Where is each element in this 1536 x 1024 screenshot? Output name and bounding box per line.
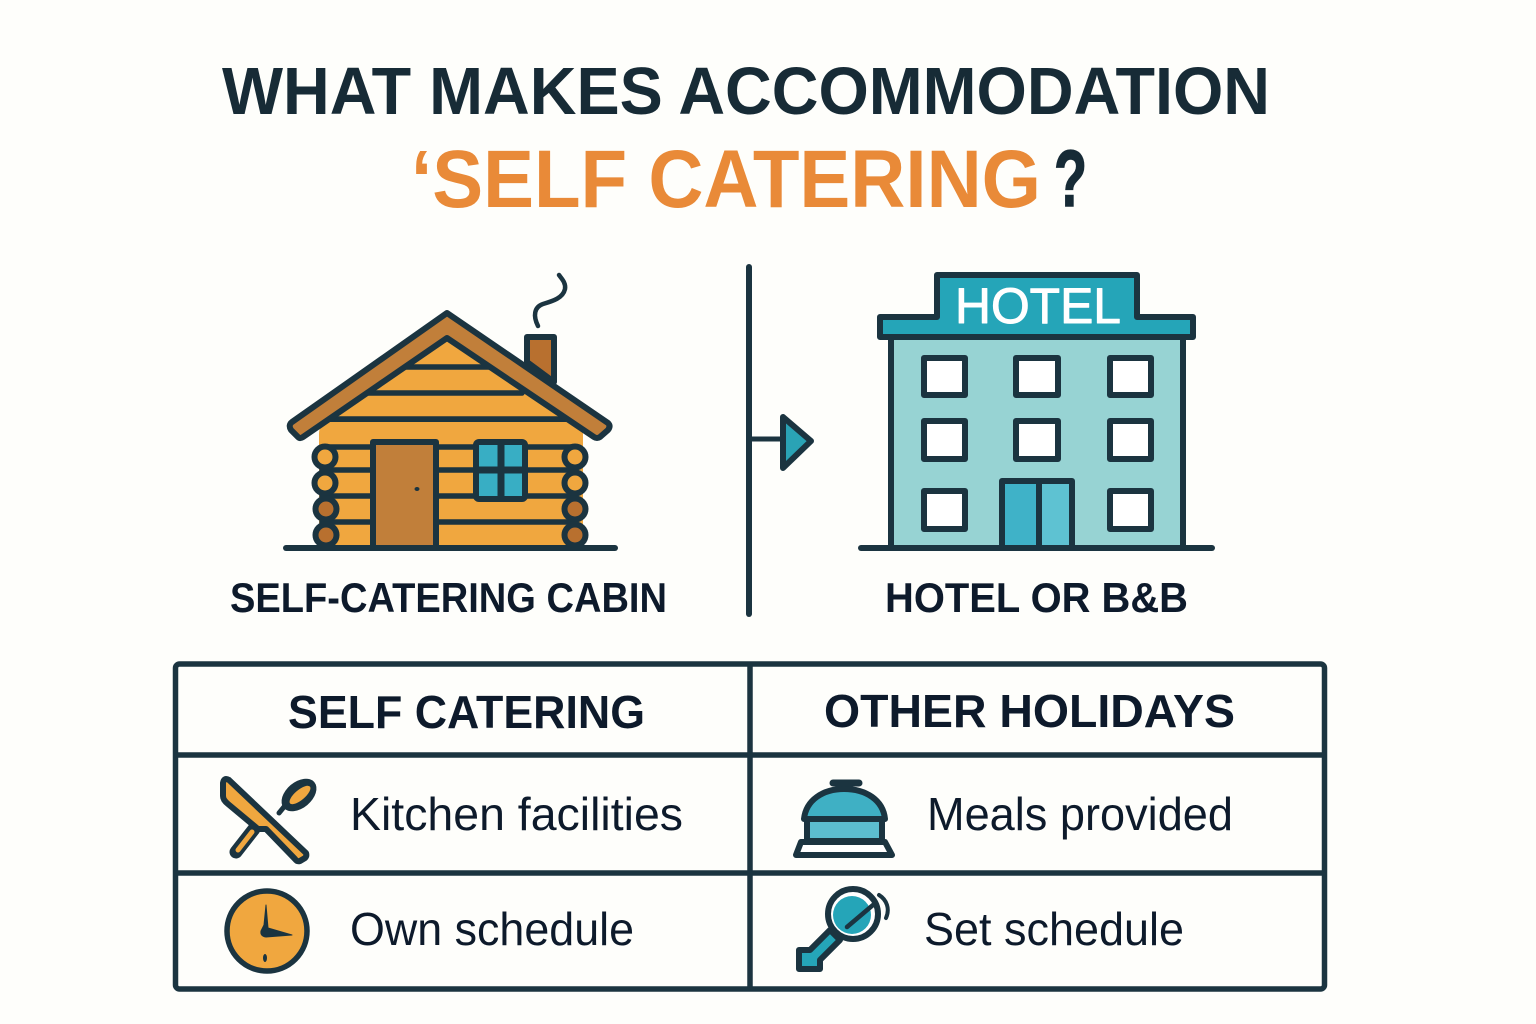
icon: knife and spoon [223, 772, 323, 861]
spoon [275, 772, 323, 818]
hotel ground [861, 545, 1212, 551]
header: other holidays: OTHER HOLIDAYS [824, 685, 1235, 737]
icon: meal bell [796, 783, 892, 855]
label: hotel or b&b: HOTEL OR B&B [885, 574, 1188, 621]
hotel building [891, 337, 1183, 548]
cabin gable [312, 338, 582, 422]
title: ? [1054, 134, 1087, 223]
table grid [175, 664, 1325, 989]
icon: key timer [799, 889, 888, 969]
text: kitchen facilities: Kitchen facilities [350, 788, 683, 840]
comparison table [175, 664, 1325, 989]
cabin wall [319, 422, 583, 548]
hotel windows [924, 358, 1151, 529]
text: meals provided: Meals provided [927, 788, 1233, 840]
cabin chimney [527, 337, 554, 382]
title [222, 54, 1270, 225]
cabin right logs [564, 446, 586, 546]
cabin log lines [322, 367, 576, 522]
hotel sign text: HOTEL [955, 278, 1121, 334]
title: ‘SELF CATERING [411, 134, 1041, 225]
icon: log cabin [286, 275, 615, 548]
cabin door [373, 442, 436, 548]
hotel sign and canopy [880, 275, 1193, 337]
icon: clock [227, 891, 307, 971]
hotel door [1002, 481, 1072, 548]
label: self-catering cabin: SELF-CATERING CABIN [230, 574, 667, 621]
text: set schedule: Set schedule [924, 903, 1184, 955]
divider with arrow [749, 267, 811, 614]
icon: hotel [861, 275, 1212, 548]
arrow head [783, 417, 811, 468]
title: WHAT MAKES ACCOMMODATION [222, 54, 1270, 129]
cabin ground [286, 545, 615, 551]
header: self catering: SELF CATERING [288, 686, 645, 738]
text: own schedule: Own schedule [350, 903, 634, 955]
cabin roof [290, 313, 610, 438]
cabin window [476, 442, 525, 499]
cabin smoke [535, 275, 565, 326]
cabin left logs [314, 446, 336, 546]
